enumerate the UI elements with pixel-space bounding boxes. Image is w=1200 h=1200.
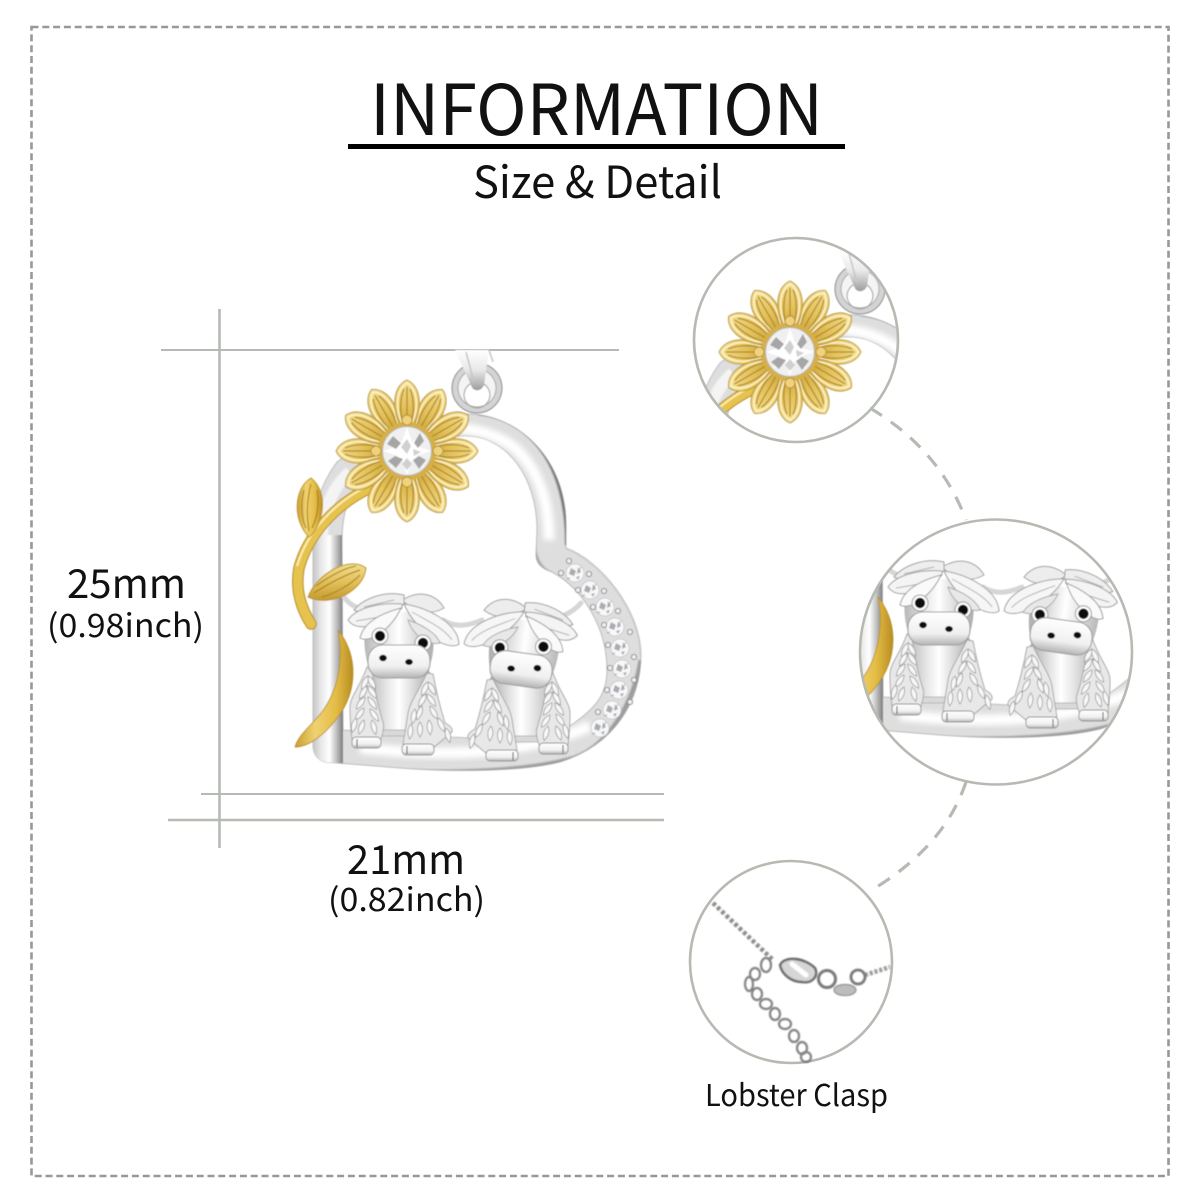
- diamond prongs: [371, 415, 443, 487]
- highland cow, right: [459, 594, 581, 761]
- detail circle: lobster clasp close-up: [690, 861, 892, 1063]
- dimension guide lines: [161, 309, 664, 848]
- cow horns: [344, 597, 581, 625]
- centre diamond: [378, 422, 436, 480]
- chain, right: [865, 967, 890, 975]
- detail circle: sunflower close-up: [692, 236, 900, 444]
- main pendant: heart with sunflower and two highland cows: [295, 350, 641, 772]
- sunflower: [336, 380, 478, 522]
- jump ring and bail: [452, 350, 502, 413]
- highland cow, left: [348, 594, 459, 755]
- label: height in inches: (0.98inch): [47, 601, 204, 647]
- dashed connector: cows to clasp: [875, 782, 966, 888]
- extender chain: [745, 958, 811, 1062]
- label: Lobster Clasp: Lobster Clasp: [705, 1071, 888, 1115]
- sunflower petals: [336, 380, 478, 522]
- heart frame: [313, 413, 641, 772]
- label: width in inches: (0.82inch): [328, 875, 485, 921]
- gold leaf, upper: [297, 478, 323, 537]
- lobster clasp: [780, 959, 865, 996]
- dashed connector: sunflower to cows: [870, 408, 966, 520]
- title underline: [348, 144, 845, 149]
- chain, upper left: [713, 903, 773, 960]
- subtitle: Size & Detail: Size & Detail: [473, 147, 722, 211]
- gold stem: [295, 488, 368, 747]
- pave gemstones along the right lobe: [558, 558, 637, 737]
- detail circle: highland cows close-up: [858, 518, 1134, 786]
- gold leaf, lower: [308, 564, 366, 600]
- label: height 25mm: 25mm: [67, 552, 186, 610]
- label: width 21mm: 21mm: [347, 828, 465, 886]
- title: INFORMATION: INFORMATION: [370, 55, 823, 156]
